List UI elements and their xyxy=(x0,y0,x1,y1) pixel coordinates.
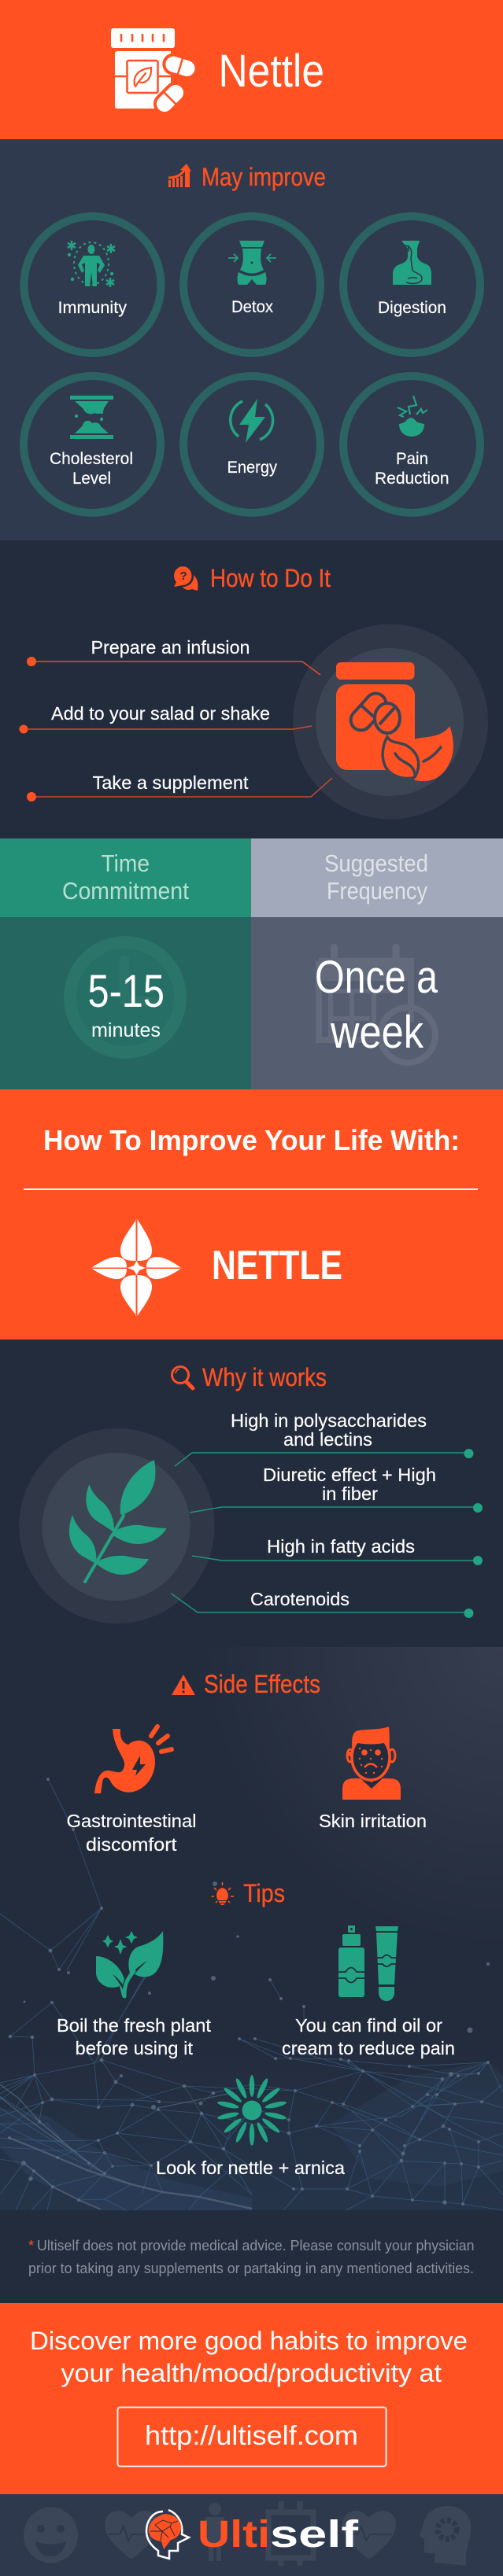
heading: time commitment xyxy=(62,849,189,905)
illustration: supplement jar in circles xyxy=(293,625,488,820)
side effect: gastrointestinal discomfort: Gastrointestinal xyxy=(66,1811,196,1831)
icon: nettle leaf cross xyxy=(91,1219,181,1316)
icon: brain head xyxy=(146,2510,189,2559)
reason: carotenoids xyxy=(172,1589,474,1618)
item: pain reduction: Pain xyxy=(396,450,428,468)
heading: tips xyxy=(211,1879,285,1907)
icon: sparkling plant xyxy=(96,1931,163,1996)
tip: nettle and arnica: Look for nettle + arnica xyxy=(156,2158,345,2178)
icon: light bulb xyxy=(211,1882,234,1905)
text: discover more: your health/mood/productivity at xyxy=(61,2359,442,2387)
icon: digestive tract xyxy=(393,241,431,285)
side effect: gastrointestinal discomfort xyxy=(66,1727,196,1855)
panel: how to improve your life xyxy=(0,1089,503,1340)
panel: call to action xyxy=(0,2303,503,2494)
illustration: nettle branch in circles xyxy=(19,1428,214,1623)
heading: time commitment: Time xyxy=(101,849,150,877)
step: take a supplement: Take a supplement xyxy=(93,772,249,793)
item: cholesterol level: Cholesterol xyxy=(50,450,133,468)
tip: oil or cream: cream to reduce pain xyxy=(282,2038,455,2058)
tip: boil the fresh plant: before using it xyxy=(76,2038,194,2058)
faint background icons xyxy=(24,2501,471,2566)
step: add to salad or shake: Add to your salad or shake xyxy=(51,703,270,724)
tip: nettle and arnica xyxy=(156,2075,345,2178)
reason: polysaccharides and lectins xyxy=(175,1410,474,1466)
heading: how to do it: How to Do It xyxy=(210,564,331,592)
item: digestion xyxy=(343,216,480,353)
logo: ultiself: Ulti xyxy=(198,2514,270,2556)
icon: stomach with bolt xyxy=(94,1727,172,1793)
title: Nettle xyxy=(219,46,324,97)
heading: suggested frequency: Suggested xyxy=(324,849,428,877)
reason: diuretic effect and fiber: in fiber xyxy=(322,1483,378,1504)
panel: footer xyxy=(0,2494,503,2576)
panel: suggested frequency xyxy=(251,838,503,1089)
heading: may improve: May improve xyxy=(202,163,326,191)
heading: how to improve your life with: How To Improve Your Life With: xyxy=(43,1124,460,1156)
step: prepare an infusion xyxy=(27,637,320,675)
heading: time commitment: Commitment xyxy=(62,877,189,905)
side effect: skin irritation xyxy=(319,1727,427,1831)
item: pain reduction xyxy=(343,376,480,513)
icon: question bubbles: ? xyxy=(179,569,187,583)
panel: may improve xyxy=(0,139,503,540)
item: immunity xyxy=(24,216,161,353)
icon: faint clock xyxy=(70,942,180,1052)
item: energy: Energy xyxy=(227,459,277,477)
item: immunity: Immunity xyxy=(58,299,128,317)
panel: time commitment xyxy=(0,838,251,1089)
icon: rising chart xyxy=(168,164,191,187)
icon: magnifier xyxy=(172,1367,193,1388)
item: pain reduction: Reduction xyxy=(375,470,449,488)
item: detox xyxy=(183,216,320,353)
value: once a week: Once a xyxy=(315,952,438,1003)
heading: side effects: Side Effects xyxy=(204,1670,320,1698)
item: cholesterol level xyxy=(24,376,161,513)
logo: ultiself xyxy=(146,2510,359,2559)
reason: carotenoids: Carotenoids xyxy=(250,1589,350,1609)
icon: detox waist xyxy=(228,241,276,285)
icon: warning triangle xyxy=(172,1675,195,1695)
panel: how to do it xyxy=(0,540,503,838)
icon: supplement bottle with pills xyxy=(111,28,201,120)
disclaimer: prior to taking any supplements or partaking in any mentioned activities. xyxy=(28,2261,474,2276)
value: 5-15 minutes xyxy=(88,966,165,1041)
reason: diuretic effect and fiber: Diuretic effect + High xyxy=(263,1465,436,1485)
reason: polysaccharides and lectins: High in polysaccharides xyxy=(231,1410,427,1431)
tip: boil the fresh plant: Boil the fresh plant xyxy=(57,2015,212,2036)
disclaimer: * xyxy=(28,2238,34,2254)
button: website link xyxy=(118,2407,386,2467)
heading: tips: Tips xyxy=(243,1879,285,1907)
label: nettle: NETTLE xyxy=(212,1243,342,1288)
icon: energy bolt xyxy=(231,399,273,443)
heading: how to do it xyxy=(174,564,331,592)
value: once a week: week xyxy=(330,1007,424,1058)
item: cholesterol level: Level xyxy=(72,470,111,488)
heading: suggested frequency xyxy=(324,849,428,905)
value: 5-15 minutes: 5-15 xyxy=(88,966,165,1017)
reason: polysaccharides and lectins: and lectins xyxy=(283,1429,372,1450)
step: add to salad or shake xyxy=(19,703,312,733)
panel: side effects and tips xyxy=(0,1647,503,2303)
tip: boil the fresh plant xyxy=(57,1931,212,2058)
step: prepare an infusion: Prepare an infusion xyxy=(91,637,250,658)
disclaimer: Ultiself does not provide medical advice. Please consult your physician xyxy=(37,2238,474,2254)
item: detox: Detox xyxy=(231,298,273,316)
side effect: gastrointestinal discomfort: discomfort xyxy=(86,1834,177,1855)
heading: why it works: Why it works xyxy=(202,1363,327,1391)
icon: immunity xyxy=(68,241,115,287)
icon: irritated face xyxy=(342,1727,401,1800)
button: website link: http://ultiself.com xyxy=(145,2421,358,2451)
text: discover more: Discover more good habits to improve xyxy=(30,2327,468,2355)
disclaimer xyxy=(28,2238,474,2276)
icon: question bubbles xyxy=(174,566,198,591)
value: 5-15 minutes: minutes xyxy=(91,1019,161,1041)
reason: diuretic effect and fiber xyxy=(190,1465,483,1513)
value: once a week xyxy=(315,952,438,1058)
icon: arnica flower xyxy=(216,2075,287,2146)
icon: hourglass cholesterol xyxy=(70,396,113,439)
item: digestion: Digestion xyxy=(378,299,446,317)
panel: header xyxy=(0,0,503,139)
heading: suggested frequency: Frequency xyxy=(327,877,427,905)
logo: ultiself: self xyxy=(270,2514,359,2556)
icon: pain bolts xyxy=(398,396,427,437)
tip: oil or cream xyxy=(282,1926,455,2058)
tip: oil or cream: You can find oil or xyxy=(295,2015,442,2036)
item: energy xyxy=(183,376,320,513)
step: take a supplement xyxy=(27,772,332,802)
reason: fatty acids: High in fatty acids xyxy=(267,1536,415,1557)
icon: spray bottle and tube xyxy=(338,1926,398,2001)
icon: faint calendar with clock xyxy=(319,947,435,1063)
reason: fatty acids xyxy=(192,1536,483,1565)
panel: why it works xyxy=(0,1340,503,1647)
side effect: skin irritation: Skin irritation xyxy=(319,1811,427,1831)
text: discover more xyxy=(30,2327,468,2387)
